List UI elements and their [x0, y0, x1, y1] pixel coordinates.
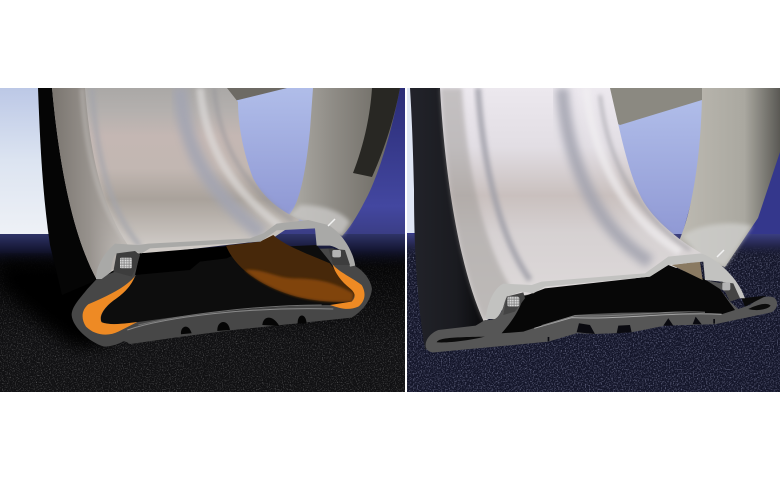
rim barrel [440, 88, 705, 322]
tyre sidewall [38, 88, 86, 260]
steel belt lines [127, 305, 333, 330]
bead left [113, 251, 140, 277]
bead right [720, 282, 740, 302]
rim highlight [717, 250, 724, 257]
tyre cavity [502, 265, 735, 333]
far sky [407, 152, 780, 234]
right cavity wall fold [742, 296, 767, 307]
spoke at top [225, 88, 287, 101]
tread grooves [181, 316, 307, 334]
tyre sidewall [410, 88, 487, 350]
black cavity shadow [135, 246, 232, 275]
steel belt lines [534, 312, 722, 328]
insert highlight [245, 270, 353, 302]
dark rim reflection [353, 88, 400, 177]
tread blocks [548, 317, 715, 341]
asphalt ground [407, 234, 780, 392]
bead right [328, 248, 350, 265]
translucent insert [226, 235, 355, 302]
sky background [0, 88, 48, 234]
rim highlight [328, 219, 335, 226]
light rim reflection [288, 205, 350, 236]
tyre cavity [101, 245, 355, 324]
sidewall fold slit right [748, 304, 771, 310]
sky through wheel opening [618, 100, 702, 234]
sky through wheel opening [236, 88, 313, 222]
rim barrel [52, 88, 300, 280]
orange insert right [330, 264, 365, 309]
bead left [503, 292, 525, 315]
inner liner highlight [672, 262, 703, 280]
panel: left, inflated tyre with run-flat insert [0, 88, 405, 392]
rim section [96, 220, 355, 279]
sidewall fold slit left [437, 337, 485, 342]
panel: right, deflated tyre collapsed on ground [407, 88, 780, 392]
left sky sliver [407, 88, 415, 233]
collapsed tyre section [426, 280, 777, 352]
far rim edge [678, 88, 780, 267]
infographic: two tyre cross-sections [0, 88, 780, 392]
orange insert left [83, 276, 137, 335]
far rim light lower area [683, 223, 752, 267]
far rim edge [288, 88, 400, 236]
tyre cross-section [72, 248, 372, 347]
asphalt ground [0, 234, 405, 392]
far sky behind wheel [279, 88, 405, 234]
rim section [486, 253, 745, 319]
spoke at top [608, 88, 702, 125]
